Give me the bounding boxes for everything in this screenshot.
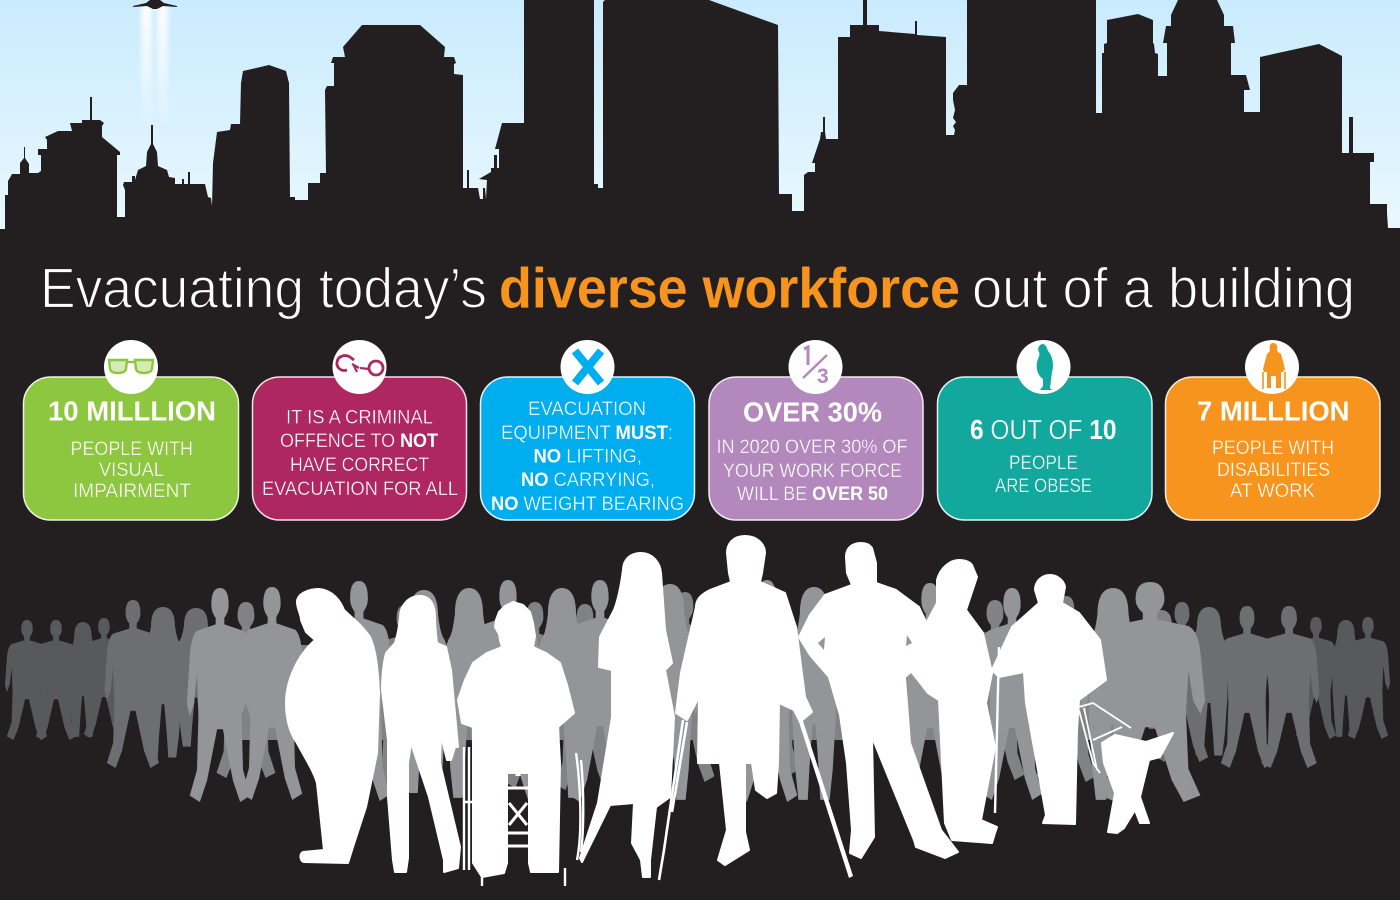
crowd: far dark row: [5, 617, 1390, 740]
text: people with disabilities at work: AT WORK: [1230, 480, 1315, 502]
text: criminal offence statement: [262, 406, 458, 500]
icon: obese person: [1016, 340, 1070, 394]
title: Evacuating today’s: [40, 256, 487, 320]
text: people with visual impairment: [70, 438, 193, 502]
panel: people with disabilities: [1166, 340, 1380, 520]
icon: one third fraction: 3: [817, 365, 829, 388]
figure: man with hands on hips: [799, 543, 958, 858]
panel: criminal offence: [252, 340, 466, 520]
text: work force over 50: YOUR WORK FORCE: [723, 460, 902, 482]
panel: evacuation equipment: [480, 340, 694, 520]
shuttle with vapour trails: [133, 0, 177, 126]
city skyline silhouette: [0, 0, 1400, 240]
figure: woman with hand on hip: [910, 560, 997, 843]
figure: over 30%: OVER 30%: [743, 396, 882, 428]
foreground figures: [286, 536, 1173, 886]
crowd: mid row: [214, 585, 1184, 790]
figure: woman with long hair: [382, 596, 460, 872]
text: equipment requirements: NO WEIGHT BEARING: [491, 493, 684, 515]
text: work force over 50: IN 2020 OVER 30% OF: [716, 436, 908, 458]
figure: 7 million: 7 MILLLION: [1197, 396, 1350, 426]
text: people with disabilities at work: PEOPLE WITH: [1212, 437, 1334, 459]
title: [40, 256, 1355, 320]
text: criminal offence statement: EVACUATION FOR ALL: [262, 478, 458, 500]
text: work force over 50: [716, 436, 908, 505]
text: people with visual impairment: PEOPLE WITH: [70, 438, 193, 460]
icon: person in wheelchair: [1245, 340, 1299, 394]
text: people with disabilities at work: DISABILITIES: [1217, 459, 1330, 481]
text: equipment requirements: EQUIPMENT MUST:: [501, 422, 673, 444]
figure: guide dog with harness: [1079, 703, 1173, 833]
crowd: second row: [104, 600, 1319, 768]
panel: obesity: [938, 340, 1152, 520]
text: people are obese: [995, 452, 1092, 497]
crowd: near grey row: [187, 580, 1205, 803]
icon: glasses: [104, 340, 158, 394]
figure: blind man with cane: [992, 575, 1106, 824]
text: people are obese: PEOPLE: [1009, 452, 1078, 474]
icon: blue cross: [560, 340, 614, 394]
text: criminal offence statement: OFFENCE TO NOT: [280, 430, 438, 452]
figure: obese man: [286, 589, 379, 863]
figure: tall woman in dress: [580, 553, 674, 877]
text: people with visual impairment: VISUAL: [99, 459, 164, 481]
figure: man with crutches: [659, 536, 853, 880]
text: people are obese: ARE OBESE: [995, 475, 1092, 497]
text: people with visual impairment: IMPAIRMENT: [73, 480, 191, 502]
text: equipment requirements: NO LIFTING,: [534, 446, 642, 468]
figure: person in wheelchair: [458, 602, 583, 886]
text: work force over 50: WILL BE OVER 50: [737, 483, 888, 505]
sky: [0, 0, 1400, 232]
text: 6 out of 10: 6 OUT OF 10: [970, 414, 1116, 445]
title: out of a building: [972, 256, 1355, 320]
text: equipment requirements: EVACUATION: [528, 398, 646, 420]
text: criminal offence statement: HAVE CORRECT: [290, 454, 429, 476]
text: criminal offence statement: IT IS A CRIMINAL: [286, 406, 433, 428]
figure: 10 million: 10 MILLLION: [48, 396, 216, 426]
text: equipment requirements: NO CARRYING,: [521, 469, 655, 491]
panel: visual impairment: [24, 340, 238, 520]
text: people with disabilities at work: [1212, 437, 1334, 502]
panel: over 30%: [709, 340, 923, 520]
icon: handcuffs: [332, 340, 386, 394]
title: diverse workforce: [499, 256, 960, 320]
text: equipment requirements: [491, 398, 684, 515]
icon: one third fraction: [788, 340, 842, 394]
